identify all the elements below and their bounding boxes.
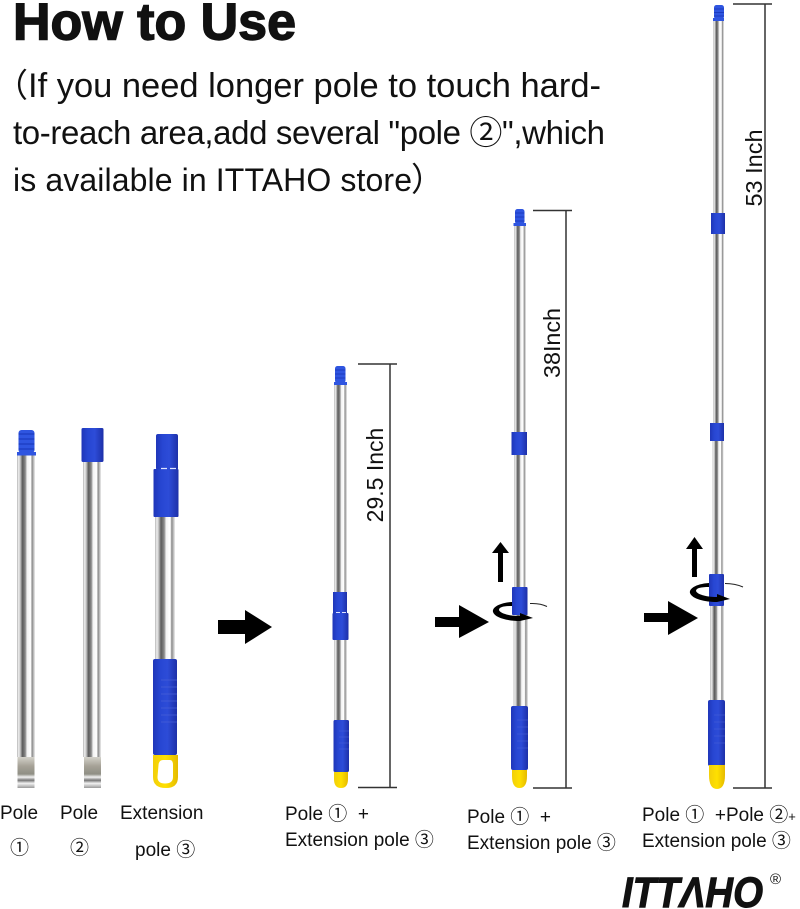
- pole 1: [17, 430, 36, 788]
- intro text: If you need longer pole to touch hard-: [28, 67, 601, 105]
- icon: up arrow and rotation, 38 inch pole: [492, 542, 547, 621]
- intro text: is available in ITTAHO store: [13, 162, 412, 198]
- caption: pole 2: Pole: [60, 803, 98, 824]
- caption: extension pole 3: Extension: [120, 803, 203, 824]
- dimension: 53 inch: 53 Inch: [741, 129, 767, 207]
- caption: extension pole 3: pole ③: [135, 839, 195, 861]
- caption: pole 1 + extension pole 3: Pole ① +: [285, 803, 369, 825]
- caption: extension pole 3: [120, 803, 203, 861]
- caption: pole 1: Pole: [0, 803, 38, 824]
- logo: ®: [770, 871, 781, 888]
- icon: up arrow and rotation, 53 inch pole: [686, 537, 743, 602]
- caption: pole 1 + extension pole 3: [285, 803, 434, 851]
- caption: pole 1: ①: [10, 837, 29, 859]
- caption: pole 1 + pole 2 + extension pole 3: [642, 804, 796, 852]
- dimension: 29.5 inch: [358, 364, 397, 788]
- caption: pole 1 + extension pole 3, second: Pole ① +: [467, 806, 551, 828]
- extension pole 3: [153, 434, 178, 788]
- caption: pole 1 + extension pole 3: Extension pole ③: [285, 829, 434, 851]
- caption: pole 1 + extension pole 3, second: Extension pole ③: [467, 832, 616, 854]
- dimension: 38 inch: [533, 210, 572, 788]
- caption: pole 1 + pole 2 + extension pole 3: Pole ① +Pole ②+: [642, 804, 796, 826]
- caption: pole 2: ②: [70, 837, 89, 859]
- intro text: [0, 67, 605, 198]
- intro text: ）: [411, 161, 444, 198]
- pole 2: [82, 428, 104, 788]
- assembled pole: 38 inch: [511, 209, 528, 788]
- dimension: 38 inch: 38Inch: [539, 308, 565, 378]
- arrow: step 3: [644, 601, 698, 635]
- intro text: to-reach area,add several "pole ②",which: [13, 114, 605, 151]
- arrow: step 1: [218, 610, 272, 644]
- assembled pole: 53 inch: [708, 5, 725, 789]
- caption: pole 1 + pole 2 + extension pole 3: Extension pole ③: [642, 830, 791, 852]
- caption: pole 1: [0, 803, 38, 859]
- caption: pole 1 + extension pole 3, second: [467, 806, 616, 854]
- caption: pole 2: [60, 803, 98, 859]
- assembled pole: 29.5 inch: [332, 366, 349, 788]
- dimension: 29.5 inch: 29.5 Inch: [362, 428, 388, 522]
- dimension: 53 inch: [733, 4, 772, 788]
- arrow: step 2: [435, 605, 489, 638]
